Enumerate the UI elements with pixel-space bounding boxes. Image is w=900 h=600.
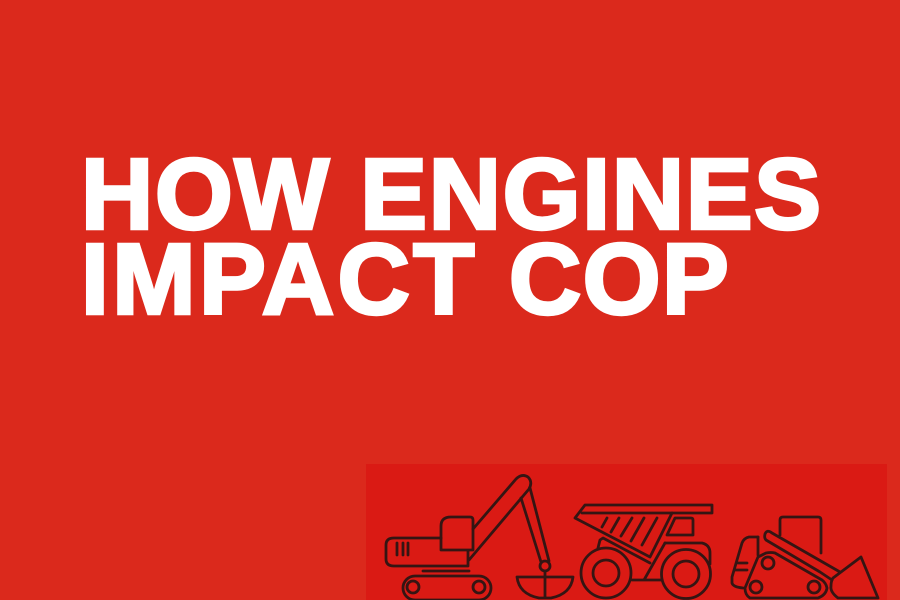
title: COP: [509, 223, 730, 335]
icon: dump truck: [575, 505, 712, 598]
title: HOW ENGINES: [81, 138, 821, 250]
title: IMPACT: [81, 223, 478, 335]
panel: machinery illustrations: [366, 464, 887, 600]
title: [81, 138, 821, 335]
icon: skid steer loader: [732, 517, 878, 598]
icon: excavator: [386, 475, 573, 600]
